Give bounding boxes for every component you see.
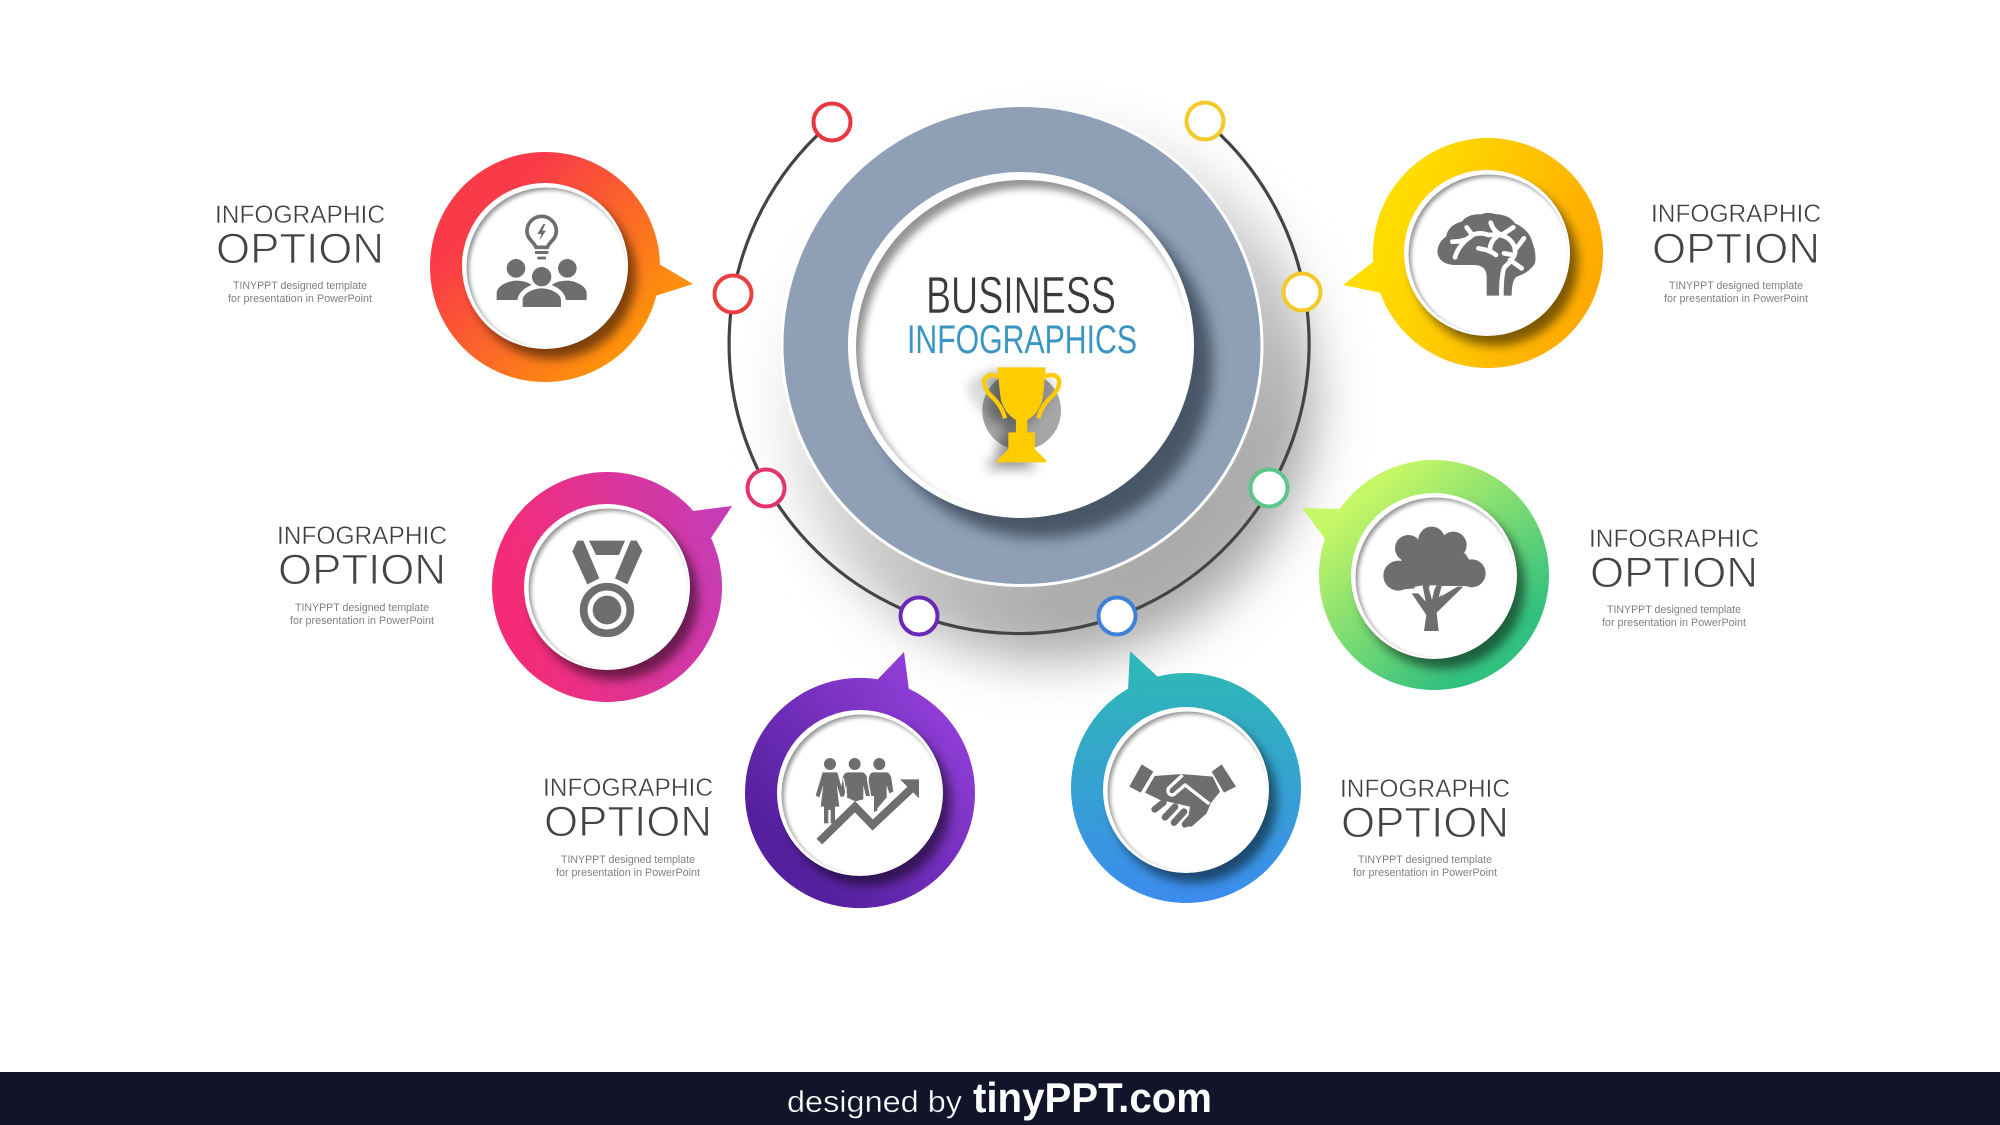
- text block: purple option: OPTION: [544, 798, 712, 846]
- text block: purple option: TINYPPT designed template: [561, 854, 695, 866]
- text block: pink option: TINYPPT designed template: [295, 602, 429, 614]
- title line: business: BUSINESS: [926, 267, 1116, 325]
- footer bar: [0, 1072, 2000, 1125]
- node: yellow top: [1186, 102, 1224, 140]
- panel: red option bubble: [425, 146, 693, 386]
- footer text: designed by: designed by: [787, 1084, 963, 1119]
- node: green: [1250, 470, 1288, 506]
- icon: medal: [572, 541, 642, 633]
- text block: blue option: OPTION: [1341, 799, 1509, 847]
- text block: blue option: [1340, 775, 1510, 879]
- panel: pink option bubble: [487, 467, 732, 707]
- node: pink: [748, 470, 784, 506]
- text block: green option: OPTION: [1590, 549, 1758, 597]
- panel: blue option bubble: [1066, 651, 1306, 910]
- node: red top: [814, 104, 850, 140]
- icon: team and growth arrow: [816, 758, 919, 842]
- node: red left: [714, 276, 752, 312]
- text block: purple option: INFOGRAPHIC: [543, 774, 713, 802]
- text block: yellow option: for presentation in PowerPoint: [1664, 293, 1808, 305]
- ring node markers: [714, 102, 1320, 634]
- text block: green option: for presentation in PowerPoint: [1602, 617, 1746, 629]
- text block: blue option: for presentation in PowerPoint: [1353, 867, 1497, 879]
- node: blue: [1098, 598, 1136, 634]
- text block: pink option: for presentation in PowerPoint: [290, 615, 434, 627]
- outer thin ring: [729, 121, 1309, 634]
- panel: yellow option bubble: [1343, 133, 1607, 373]
- text block: blue option: TINYPPT designed template: [1358, 854, 1492, 866]
- central disc: [780, 100, 1262, 590]
- text block: green option: INFOGRAPHIC: [1589, 525, 1759, 553]
- text block: purple option: [543, 774, 713, 879]
- blue ring: [782, 106, 1262, 586]
- text block: red option: INFOGRAPHIC: [215, 201, 385, 229]
- text block: red option: OPTION: [216, 225, 384, 273]
- panel: purple option bubble: [740, 652, 980, 913]
- text block: red option: for presentation in PowerPoint: [228, 293, 372, 305]
- icon: tree: [1383, 527, 1486, 631]
- icon: trophy: [974, 367, 1061, 468]
- text block: yellow option: INFOGRAPHIC: [1651, 200, 1821, 228]
- text block: pink option: OPTION: [278, 546, 446, 594]
- title line: infographics: INFOGRAPHICS: [907, 318, 1137, 362]
- node: purple: [900, 598, 938, 634]
- text block: green option: [1589, 525, 1759, 629]
- text block: blue option: INFOGRAPHIC: [1340, 775, 1510, 803]
- panel: green option bubble: [1302, 456, 1554, 696]
- text block: yellow option: [1651, 200, 1821, 305]
- text block: purple option: for presentation in PowerPoint: [556, 867, 700, 879]
- inner white face: [848, 172, 1221, 546]
- text block: red option: TINYPPT designed template: [233, 280, 367, 292]
- text block: pink option: [277, 522, 447, 627]
- background shadow of central disc: [780, 124, 1316, 660]
- text block: red option: [215, 201, 385, 305]
- text block: green option: TINYPPT designed template: [1607, 604, 1741, 616]
- text block: pink option: INFOGRAPHIC: [277, 522, 447, 550]
- title: [907, 267, 1137, 362]
- icon: handshake: [1129, 764, 1236, 827]
- icon: people with lightbulb: [497, 216, 587, 307]
- footer text: tinyPPT.com: tinyPPT.com: [973, 1074, 1212, 1121]
- text block: yellow option: OPTION: [1652, 225, 1820, 273]
- icon: brain: [1437, 213, 1535, 297]
- text block: yellow option: TINYPPT designed template: [1669, 280, 1803, 292]
- node: yellow right: [1284, 274, 1320, 310]
